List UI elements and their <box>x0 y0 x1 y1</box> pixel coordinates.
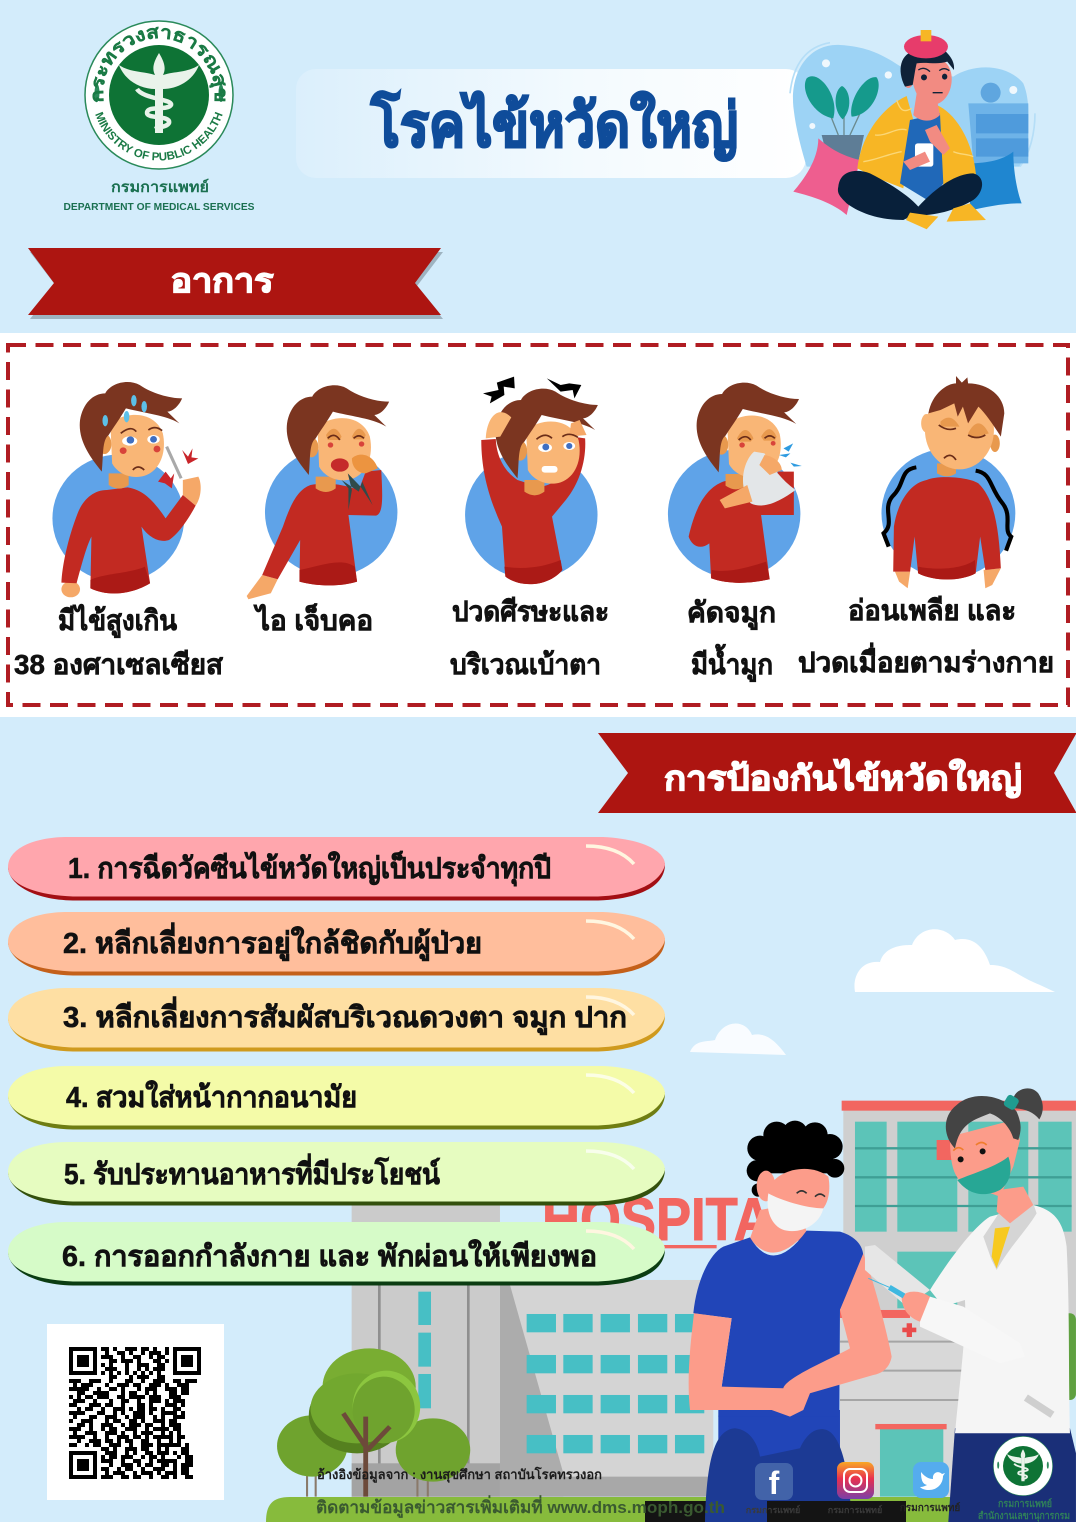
ribbon heading: prevention: การป้องกันไข้หวัดใหญ่ <box>664 758 1022 799</box>
icon: facebook: กรมการแพทย์ <box>746 1504 800 1515</box>
ribbon heading: symptoms: อาการ <box>170 262 274 299</box>
symptom label 3 <box>450 596 609 680</box>
patient receiving vaccine <box>689 1121 892 1522</box>
symptom label 4: คัดจมูก <box>687 597 776 630</box>
icon: instagram <box>828 1462 882 1515</box>
prevention item 1 <box>8 837 665 900</box>
department name: DEPARTMENT OF MEDICAL SERVICES <box>64 201 254 213</box>
icon: instagram: กรมการแพทย์ <box>828 1504 882 1515</box>
prevention item 2: 2. หลีกเลี่ยงการอยู่ใกล้ชิดกับผู้ป่วย <box>63 922 482 961</box>
prevention item 6: 6. การออกกำลังกาย และ พักผ่อนให้เพียงพอ <box>62 1239 597 1273</box>
logo: Ministry of Public Health: MINISTRY OF PUBLIC HEALTH <box>95 112 223 160</box>
icon: twitter: กรมการแพทย์ <box>900 1502 960 1514</box>
prevention item 5 <box>8 1142 665 1206</box>
symptom label 3: บริเวณเบ้าตา <box>450 649 601 680</box>
panel: symptoms <box>0 333 1076 717</box>
tree <box>277 1348 470 1497</box>
prevention item 4 <box>8 1066 665 1130</box>
symptom label 5: อ่อนเพลีย และ <box>848 595 1016 626</box>
boy 4: stuffy and runny nose <box>668 383 802 583</box>
boy 2: cough and sore throat <box>247 385 397 599</box>
prevention item 3: 3. หลีกเลี่ยงการสัมผัสบริเวณดวงตา จมูก ปาก <box>63 996 627 1035</box>
footer green bar <box>266 1497 950 1522</box>
source credit: อ้างอิงข้อมูลจาก : งานสุขศึกษา สถาบันโรคทรวงอก <box>317 1466 602 1483</box>
symptom label 3: ปวดศีรษะและ <box>452 596 609 627</box>
clouds <box>690 929 1055 1055</box>
icon: facebook <box>746 1463 800 1515</box>
boy 5: fatigue and body aches <box>881 376 1015 588</box>
symptom label 4 <box>687 597 776 682</box>
dark strip left of patient <box>645 1501 715 1522</box>
icon: twitter <box>900 1462 960 1514</box>
symptom label 1: มีไข้สูงเกิน <box>58 604 177 638</box>
symptom label 2: ไอ เจ็บคอ <box>253 603 373 636</box>
icon: facebook: f <box>769 1465 780 1501</box>
symptom label 1 <box>14 604 224 680</box>
hospital sign: HOSPITAL <box>542 1186 804 1253</box>
prevention item 4: 4. สวมใส่หน้ากากอนามัย <box>66 1080 357 1114</box>
logo: Ministry of Public Health: กระทรวงสาธารณสุข <box>92 26 226 102</box>
symptom label 4: มีน้ำมูก <box>691 643 773 682</box>
ribbon heading: prevention <box>598 733 1076 813</box>
prevention item 5: 5. รับประทานอาหารที่มีประโยชน์ <box>64 1153 440 1191</box>
prevention item 1: 1. การฉีดวัคซีนไข้หวัดใหญ่เป็นประจำทุกปี <box>68 850 551 886</box>
symptom label 1: 38 องศาเซลเซียส <box>14 649 224 680</box>
illustration: five boys with symptoms <box>52 376 1015 599</box>
symptom label 5 <box>798 595 1054 678</box>
prevention item 2 <box>8 912 665 976</box>
logo: Ministry of Public Health <box>84 20 234 170</box>
boy 1: fever <box>52 382 201 597</box>
prevention item 6 <box>8 1222 665 1286</box>
ribbon heading: symptoms <box>28 248 443 319</box>
follow-up website text: ติดตามข้อมูลข่าวสารเพิ่มเติมที่ www.dms.moph.go.th <box>316 1495 725 1519</box>
illustration: sick man in blanket <box>790 30 1035 229</box>
title banner: โรคไข้หวัดใหญ่ <box>370 90 738 161</box>
QR code <box>47 1324 224 1500</box>
symptom label 5: ปวดเมื่อยตามร่างกาย <box>798 642 1054 678</box>
prevention item 3 <box>8 988 665 1052</box>
small logo caption <box>978 1498 1070 1522</box>
small logo on nurse trousers <box>993 1436 1053 1496</box>
right hospital building <box>840 1101 1076 1497</box>
department name <box>64 178 254 213</box>
small logo caption: กรมการแพทย์ <box>998 1498 1052 1510</box>
title banner <box>296 69 806 178</box>
nurse giving injection <box>865 1088 1076 1522</box>
department name: กรมการแพทย์ <box>111 178 209 196</box>
left hospital building <box>352 1205 717 1498</box>
social strip <box>767 1501 906 1522</box>
boy 3: headache <box>465 377 598 584</box>
